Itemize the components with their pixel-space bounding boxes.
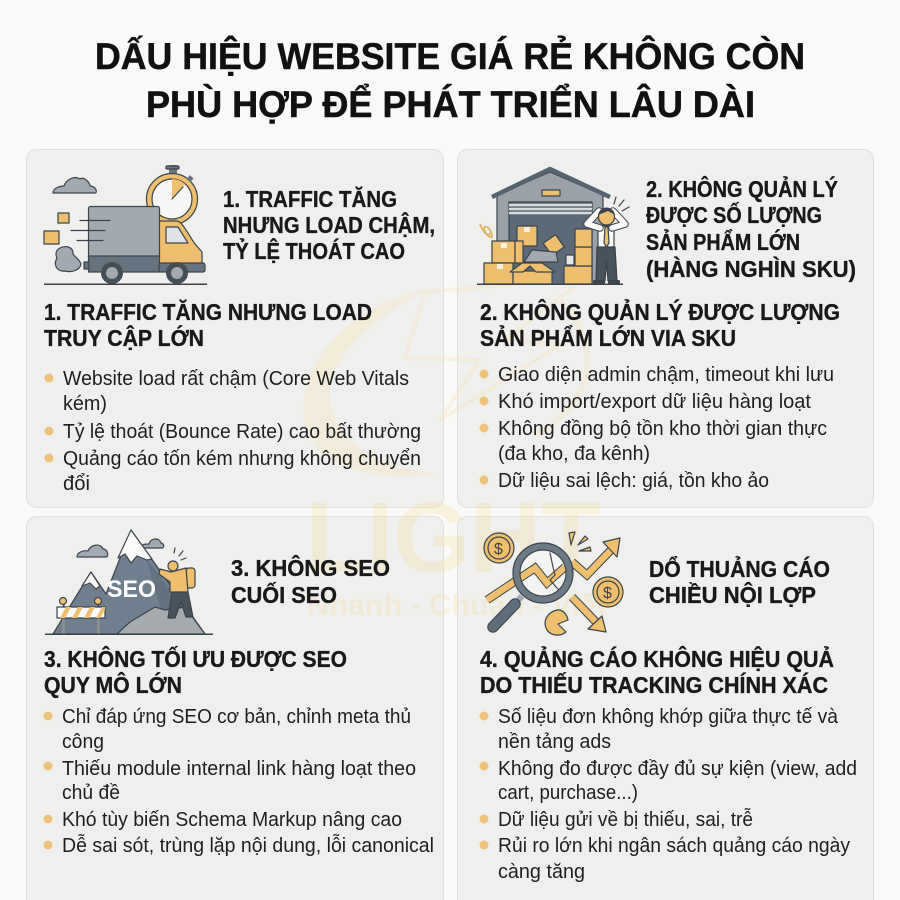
heading: card 4 icon caption xyxy=(649,554,830,608)
heading: card 1 icon caption: TỶ LỆ THOÁT CAO xyxy=(223,236,405,264)
heading: card 2: SẢN PHẨM LỚN VIA SKU xyxy=(480,323,736,351)
heading: card 2 icon caption xyxy=(646,174,856,282)
list: card 4 bullets: Rủi ro lớn khi ngân sách quảng cáo ngày xyxy=(498,835,850,857)
heading: card 4: DO THIẾU TRACKING CHÍNH XÁC xyxy=(480,671,828,698)
heading: card 2 icon caption: SẢN PHẨM LỚN xyxy=(646,227,800,255)
list: card 4 bullets: Không đo được đầy đủ sự kiện (view, add xyxy=(498,758,857,780)
list: card 2 bullets: Khó import/export dữ liệu hàng loạt xyxy=(498,391,811,413)
list: card 1 bullets: Website load rất chậm (Core Web Vitals xyxy=(63,368,409,390)
list: card 4 bullets: Số liệu đơn không khớp giữa thực tế và xyxy=(498,706,839,728)
heading: card 1: 1. TRAFFIC TĂNG NHƯNG LOAD xyxy=(44,298,372,325)
icon: SEO mountain with climber and barrier: SEO xyxy=(107,576,156,603)
list: card 3 bullets: công xyxy=(62,731,104,753)
list: card 3 bullets: Dễ sai sót, trùng lặp nội dung, lỗi canonical xyxy=(62,834,434,857)
panel: card 4 background xyxy=(458,516,874,900)
list: card 4 bullets: Dữ liệu gửi về bị thiếu, sai, trễ xyxy=(498,808,753,831)
heading: card 1: TRUY CẬP LỚN xyxy=(44,324,204,351)
heading: card 2 xyxy=(480,297,840,351)
list: card 2 bullets xyxy=(480,364,834,492)
list: card 2 bullets: Không đồng bộ tồn kho thời gian thực xyxy=(498,418,827,440)
heading: card 1 icon caption: 1. TRAFFIC TĂNG xyxy=(223,185,397,212)
heading: card 4 icon caption: CHIỀU NỘI LỢP xyxy=(649,581,816,608)
list: card 1 bullets xyxy=(44,368,421,495)
watermark: LIGHT logo: Nhanh - Chuẩn - Việt xyxy=(307,589,607,622)
title xyxy=(95,35,805,125)
heading: card 3 icon caption xyxy=(231,554,390,608)
icon: magnifier over cracked chart with coins and arrows: $ xyxy=(603,585,612,602)
list: card 3 bullets: Khó tùy biến Schema Markup nâng cao xyxy=(62,809,402,831)
heading: card 1 xyxy=(44,298,372,351)
list: card 1 bullets: Quảng cáo tốn kém nhưng không chuyển xyxy=(63,448,421,470)
heading: card 2 icon caption: ĐƯỢC SỐ LƯỢNG xyxy=(646,201,822,228)
heading: card 3: QUY MÔ LỚN xyxy=(44,671,182,698)
list: card 1 bullets: đổi xyxy=(63,473,90,495)
title: PHÙ HỢP ĐỂ PHÁT TRIỂN LÂU DÀI xyxy=(146,83,755,125)
icon: magnifier over cracked chart with coins and arrows: $ xyxy=(494,541,503,558)
heading: card 4: 4. QUẢNG CÁO KHÔNG HIỆU QUẢ xyxy=(480,644,834,672)
heading: card 3 icon caption: 3. KHÔNG SEO xyxy=(231,554,390,581)
heading: card 2: 2. KHÔNG QUẢN LÝ ĐƯỢC LƯỢNG xyxy=(480,297,840,325)
heading: card 3 icon caption: CUỐI SEO xyxy=(231,581,337,608)
list: card 2 bullets: Giao diện admin chậm, timeout khi lưu xyxy=(498,364,834,386)
watermark: LIGHT logo: LIGHT xyxy=(306,482,601,594)
list: card 2 bullets: (đa kho, đa kênh) xyxy=(498,443,650,465)
heading: card 2 icon caption: 2. KHÔNG QUẢN LÝ xyxy=(646,174,838,202)
panel: card 2 background xyxy=(458,150,874,508)
list: card 3 bullets: Chỉ đáp ứng SEO cơ bản, chỉnh meta thủ xyxy=(62,706,411,728)
list: card 3 bullets: Thiếu module internal link hàng loạt theo xyxy=(62,758,416,780)
list: card 4 bullets: càng tăng xyxy=(498,861,585,883)
heading: card 3: 3. KHÔNG TỐI ƯU ĐƯỢC SEO xyxy=(44,645,347,672)
list: card 4 bullets: nền tảng ads xyxy=(498,731,611,753)
panel: card 1 background xyxy=(26,150,444,508)
list: card 1 bullets: kém) xyxy=(63,393,107,415)
heading: card 1 icon caption: NHƯNG LOAD CHẬM, xyxy=(223,211,435,238)
list: card 1 bullets: Tỷ lệ thoát (Bounce Rate) cao bất thường xyxy=(63,421,421,443)
watermark: LIGHT logo xyxy=(304,278,607,622)
icon: magnifier over cracked chart with coins and arrows xyxy=(484,532,623,635)
heading: card 1 icon caption xyxy=(223,185,435,264)
list: card 3 bullets xyxy=(44,706,434,857)
heading: card 3 xyxy=(44,645,347,698)
panel: card 3 background xyxy=(26,516,444,900)
heading: card 4 xyxy=(480,644,834,698)
icon: SEO mountain with climber and barrier xyxy=(45,530,213,635)
title: DẤU HIỆU WEBSITE GIÁ RẺ KHÔNG CÒN xyxy=(95,35,805,77)
heading: card 2 icon caption: (HÀNG NGHÌN SKU) xyxy=(646,255,856,282)
list: card 4 bullets xyxy=(480,706,857,883)
icon: delivery truck and stopwatch xyxy=(44,165,207,285)
heading: card 4 icon caption: DỔ THUẢNG CÁO xyxy=(649,554,830,582)
list: card 2 bullets: Dữ liệu sai lệch: giá, tồn kho ảo xyxy=(498,470,769,492)
list: card 3 bullets: chủ đề xyxy=(62,782,120,804)
list: card 4 bullets: cart, purchase...) xyxy=(498,782,638,804)
icon: warehouse with overflowing boxes and stressed worker xyxy=(477,169,629,285)
